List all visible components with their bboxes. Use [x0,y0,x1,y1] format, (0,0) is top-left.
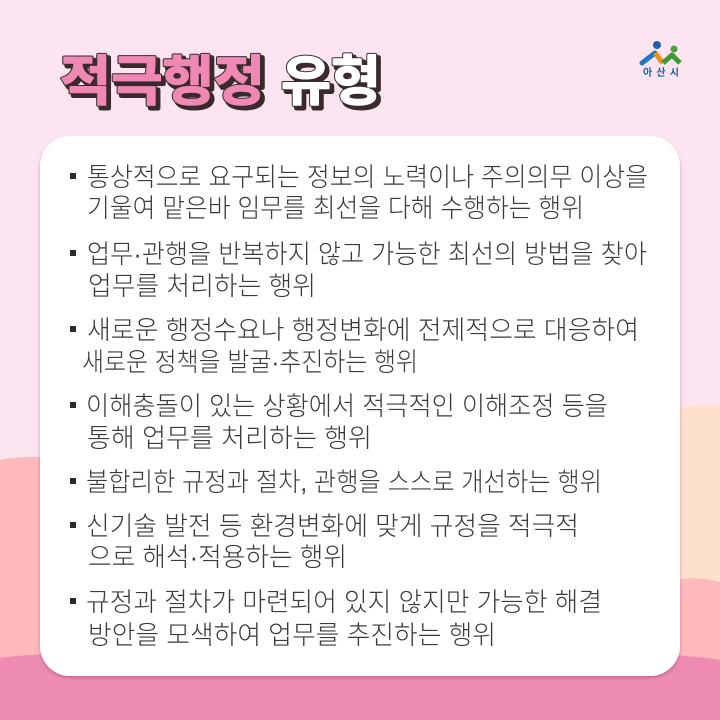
item 3: 새로운 정책을 발굴·추진하는 행위 [82,347,418,377]
item 4: 이해충돌이 있는 상황에서 적극적인 이해조정 등을 [86,391,608,421]
item 4 [70,391,608,453]
item 7: 규정과 절차가 마련되어 있지 않지만 가능한 해결 [86,587,602,617]
item 6: 으로 해석·적용하는 행위 [88,542,347,572]
item 1: 통상적으로 요구되는 정보의 노력이나 주의의무 이상을 [87,162,648,192]
title: 유형 [281,52,381,112]
panel: types list [40,136,680,676]
item 2: 업무·관행을 반복하지 않고 가능한 최선의 방법을 찾아 [87,239,647,269]
title [60,52,384,115]
item 7 [70,587,602,650]
item 1: 기울여 맡은바 임무를 최선을 다해 수행하는 행위 [87,193,584,223]
item 1 [70,162,648,223]
item 5: 불합리한 규정과 절차, 관행을 스스로 개선하는 행위 [86,467,602,497]
item 6 [70,511,579,572]
title: 적극행정 [60,52,265,112]
icon: Asan city logo: 아 산 시 [643,66,679,79]
item 7: 방안을 모색하여 업무를 추진하는 행위 [88,620,496,650]
title: 유형 [284,55,384,115]
title: 유형 [281,52,381,112]
item 3 [70,315,639,377]
item 2: 업무를 처리하는 행위 [88,271,316,301]
icon: Asan city logo [642,41,680,79]
item 3: 새로운 행정수요나 행정변화에 전제적으로 대응하여 [87,315,639,345]
title: 적극행정 [63,55,268,115]
item 6: 신기술 발전 등 환경변화에 맞게 규정을 적극적 [86,511,579,541]
item 4: 통해 업무를 처리하는 행위 [87,423,372,453]
title: 적극행정 [60,52,265,112]
item 2 [70,239,647,301]
